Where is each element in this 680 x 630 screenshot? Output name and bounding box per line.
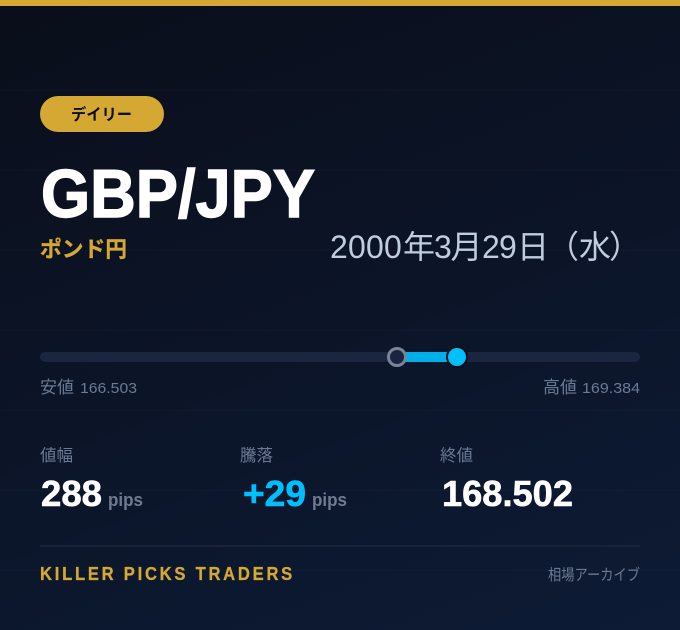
stat: range: 値幅 bbox=[40, 446, 73, 465]
stat: range bbox=[40, 446, 143, 514]
stat: change: pips bbox=[312, 490, 347, 510]
brand footer: KILLER PICKS TRADERS bbox=[40, 564, 295, 584]
stat: range: pips bbox=[108, 490, 143, 510]
slider active range bbox=[397, 352, 457, 362]
archive label: 相場アーカイブ bbox=[548, 565, 640, 584]
slider track bbox=[40, 352, 640, 362]
stat: close bbox=[440, 446, 573, 514]
high price label: 高値 bbox=[543, 378, 577, 397]
open price marker bbox=[388, 348, 406, 366]
title: GBP/JPY: GBP/JPY bbox=[41, 156, 315, 232]
stat: change bbox=[240, 446, 347, 514]
range slider bbox=[40, 347, 640, 367]
close price marker bbox=[447, 347, 467, 367]
stat: range: 288 bbox=[41, 473, 102, 514]
stat: close: 終値 bbox=[440, 446, 473, 465]
low price label: 安値 bbox=[40, 378, 74, 397]
low price label: 166.503 bbox=[80, 380, 137, 397]
stat: change: 騰落 bbox=[240, 446, 274, 465]
stat: close: 168.502 bbox=[442, 473, 573, 514]
date: 2000年3月29日（水） bbox=[330, 229, 641, 265]
badge: デイリー bbox=[40, 96, 164, 132]
stat: change: +29 bbox=[243, 473, 306, 514]
badge: デイリー: デイリー bbox=[71, 105, 132, 124]
low price label bbox=[40, 378, 137, 397]
high price label: 169.384 bbox=[582, 380, 640, 397]
high price label bbox=[543, 378, 640, 397]
top accent bar bbox=[0, 0, 680, 6]
subtitle: ポンド円: ポンド円 bbox=[40, 237, 127, 262]
